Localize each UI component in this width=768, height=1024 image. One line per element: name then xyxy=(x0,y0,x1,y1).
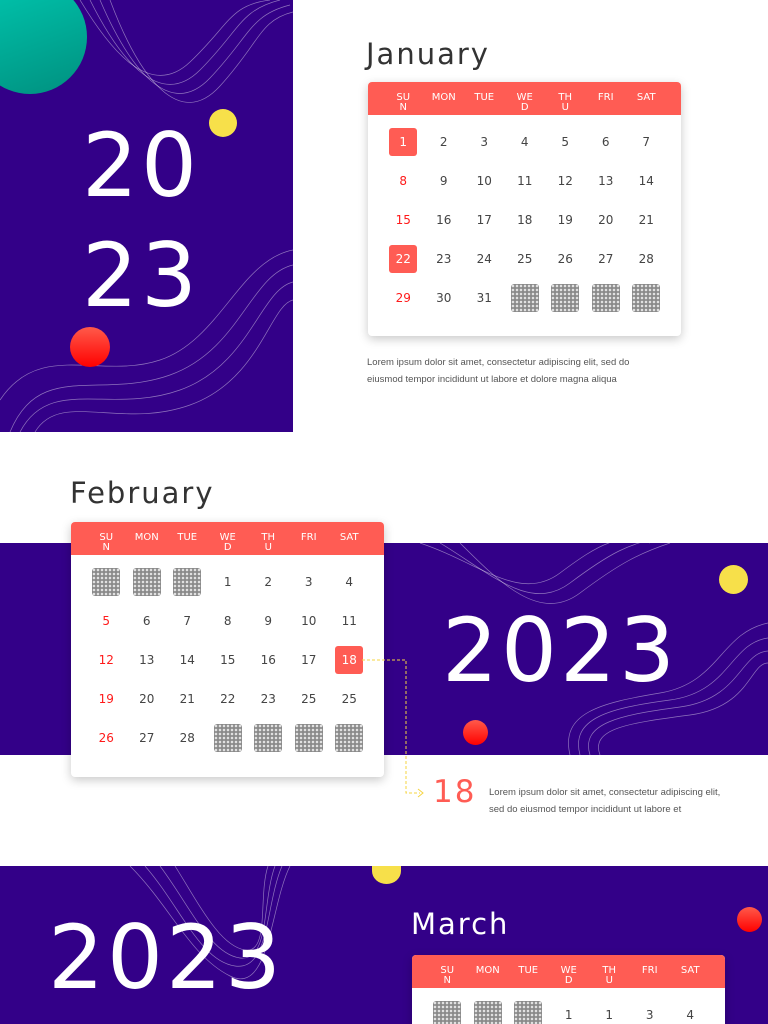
calendar: February: 20 xyxy=(139,692,154,706)
red dot xyxy=(463,720,488,745)
calendar: February: 27 xyxy=(139,731,154,745)
calendar: February: 12 xyxy=(99,653,114,667)
calendar: January: 17 xyxy=(477,213,492,227)
calendar: February: 23 xyxy=(261,692,276,706)
year 20 23: 23 xyxy=(82,224,200,327)
calendar: February: FRI xyxy=(301,532,317,543)
calendar: February: 28 xyxy=(180,731,195,745)
calendar: February: 11 xyxy=(342,614,357,628)
calendar: January: TUE xyxy=(474,92,494,103)
heading: January: January xyxy=(366,37,490,71)
yellow dot xyxy=(372,858,401,884)
calendar: February: 3 xyxy=(305,575,313,589)
calendar: January: 18 xyxy=(517,213,532,227)
decorative waves xyxy=(0,0,293,432)
calendar: January: 12 xyxy=(558,174,573,188)
text: January note: Lorem ipsum dolor sit amet, consectetur adipiscing elit, sed do eiusmod tempor incididunt ut labore et dolore magna aliqua xyxy=(367,357,629,385)
calendar: January: 14 xyxy=(639,174,654,188)
calendar: January: 25 xyxy=(517,252,532,266)
calendar: February: 15 xyxy=(220,653,235,667)
year 2023: 2023 xyxy=(48,906,284,1009)
calendar: February: TUE xyxy=(177,532,197,543)
calendar: February xyxy=(71,522,384,777)
calendar: February: 25 xyxy=(301,692,316,706)
calendar: March: FRI xyxy=(642,965,658,976)
calendar: January: 30 xyxy=(436,291,451,305)
calendar: January: WE xyxy=(517,92,533,103)
year 2023: 2023 xyxy=(442,599,678,702)
calendar: February: 26 xyxy=(99,731,114,745)
calendar: February: 4 xyxy=(345,575,353,589)
calendar: January: 19 xyxy=(558,213,573,227)
calendar: February: 7 xyxy=(183,614,191,628)
arrow: dashed connector xyxy=(362,660,424,798)
red dot xyxy=(737,907,762,932)
calendar: March: WE xyxy=(561,965,577,976)
calendar: January: 24 xyxy=(477,252,492,266)
calendar: January: SAT xyxy=(637,92,656,103)
calendar: January: 20 xyxy=(598,213,613,227)
year 20 23 xyxy=(82,114,200,327)
calendar: January: 22 xyxy=(396,252,411,266)
calendar: February: 13 xyxy=(139,653,154,667)
calendar: January: 7 xyxy=(642,135,650,149)
calendar: January: 6 xyxy=(602,135,610,149)
calendar: January: MON xyxy=(432,92,456,103)
calendar: February: 2 xyxy=(264,575,272,589)
calendar: February: 25 xyxy=(342,692,357,706)
calendar: February: 1 xyxy=(224,575,232,589)
calendar: February: SU xyxy=(99,532,113,543)
calendar: February: SAT xyxy=(340,532,359,543)
calendar: March: 4 xyxy=(686,1008,694,1022)
calendar: February: 8 xyxy=(224,614,232,628)
calendar: February: 9 xyxy=(264,614,272,628)
calendar: March: U xyxy=(606,975,613,986)
calendar: March: TUE xyxy=(518,965,538,976)
calendar: January: FRI xyxy=(598,92,614,103)
calendar: February: 6 xyxy=(143,614,151,628)
calendar: March: 1 xyxy=(565,1008,573,1022)
year 20 23: 20 xyxy=(82,114,200,217)
calendar: January xyxy=(368,82,681,336)
calendar: March: TH xyxy=(602,965,616,976)
calendar: March: 3 xyxy=(646,1008,654,1022)
heading: March: March xyxy=(411,907,509,941)
calendar: January: 29 xyxy=(396,291,411,305)
calendar: March: SAT xyxy=(681,965,700,976)
red dot xyxy=(70,327,110,367)
calendar: January: 8 xyxy=(399,174,407,188)
calendar: February: 17 xyxy=(301,653,316,667)
calendar: January: 15 xyxy=(396,213,411,227)
calendar: January: U xyxy=(562,102,569,113)
calendar: January: D xyxy=(521,102,529,113)
calendar: January: N xyxy=(400,102,407,113)
calendar: February: 5 xyxy=(102,614,110,628)
heading: February: February xyxy=(70,476,215,510)
calendar: February: MON xyxy=(135,532,159,543)
calendar: February: 14 xyxy=(180,653,195,667)
yellow dot xyxy=(209,109,237,137)
panel: february band xyxy=(0,543,768,755)
calendar: January: 27 xyxy=(598,252,613,266)
calendar: January: 2 xyxy=(440,135,448,149)
calendar: January: TH xyxy=(558,92,572,103)
calendar: February: 19 xyxy=(99,692,114,706)
calendar: February: D xyxy=(224,542,232,553)
calendar: January: 11 xyxy=(517,174,532,188)
panel: january cover xyxy=(0,0,293,432)
calendar: January: 23 xyxy=(436,252,451,266)
calendar: January: 26 xyxy=(558,252,573,266)
callout: 18: 18 xyxy=(433,774,476,810)
calendar: February: WE xyxy=(220,532,236,543)
yellow dot xyxy=(719,565,748,594)
calendar: January: 3 xyxy=(480,135,488,149)
calendar: January: 13 xyxy=(598,174,613,188)
calendar: February: 21 xyxy=(180,692,195,706)
calendar: January: SU xyxy=(396,92,410,103)
calendar: February: 18 xyxy=(342,653,357,667)
calendar: January: 4 xyxy=(521,135,529,149)
text: February note: Lorem ipsum dolor sit amet, consectetur adipiscing elit, sed do eiusmod tempor incididunt ut labore et xyxy=(489,787,720,815)
calendar: January: 16 xyxy=(436,213,451,227)
calendar: March: 1 xyxy=(605,1008,613,1022)
calendar: March: N xyxy=(444,975,451,986)
calendar: February: U xyxy=(265,542,272,553)
calendar: March: D xyxy=(565,975,573,986)
calendar: January: 9 xyxy=(440,174,448,188)
panel: march band xyxy=(0,866,768,1024)
calendar: January: 21 xyxy=(639,213,654,227)
calendar: January: 1 xyxy=(399,135,407,149)
decorative waves xyxy=(420,543,768,755)
calendar: February: 22 xyxy=(220,692,235,706)
calendar: March: SU xyxy=(440,965,454,976)
calendar: January: 28 xyxy=(639,252,654,266)
decorative waves xyxy=(130,866,290,980)
calendar: February: N xyxy=(102,542,110,553)
calendar: March xyxy=(412,955,725,1024)
calendar: February: TH xyxy=(261,532,275,543)
calendar: January: 31 xyxy=(477,291,492,305)
teal circle xyxy=(0,0,87,94)
calendar: January: 5 xyxy=(561,135,569,149)
calendar: February: 16 xyxy=(261,653,276,667)
calendar: February: 10 xyxy=(301,614,316,628)
calendar: March: MON xyxy=(476,965,500,976)
calendar: January: 10 xyxy=(477,174,492,188)
